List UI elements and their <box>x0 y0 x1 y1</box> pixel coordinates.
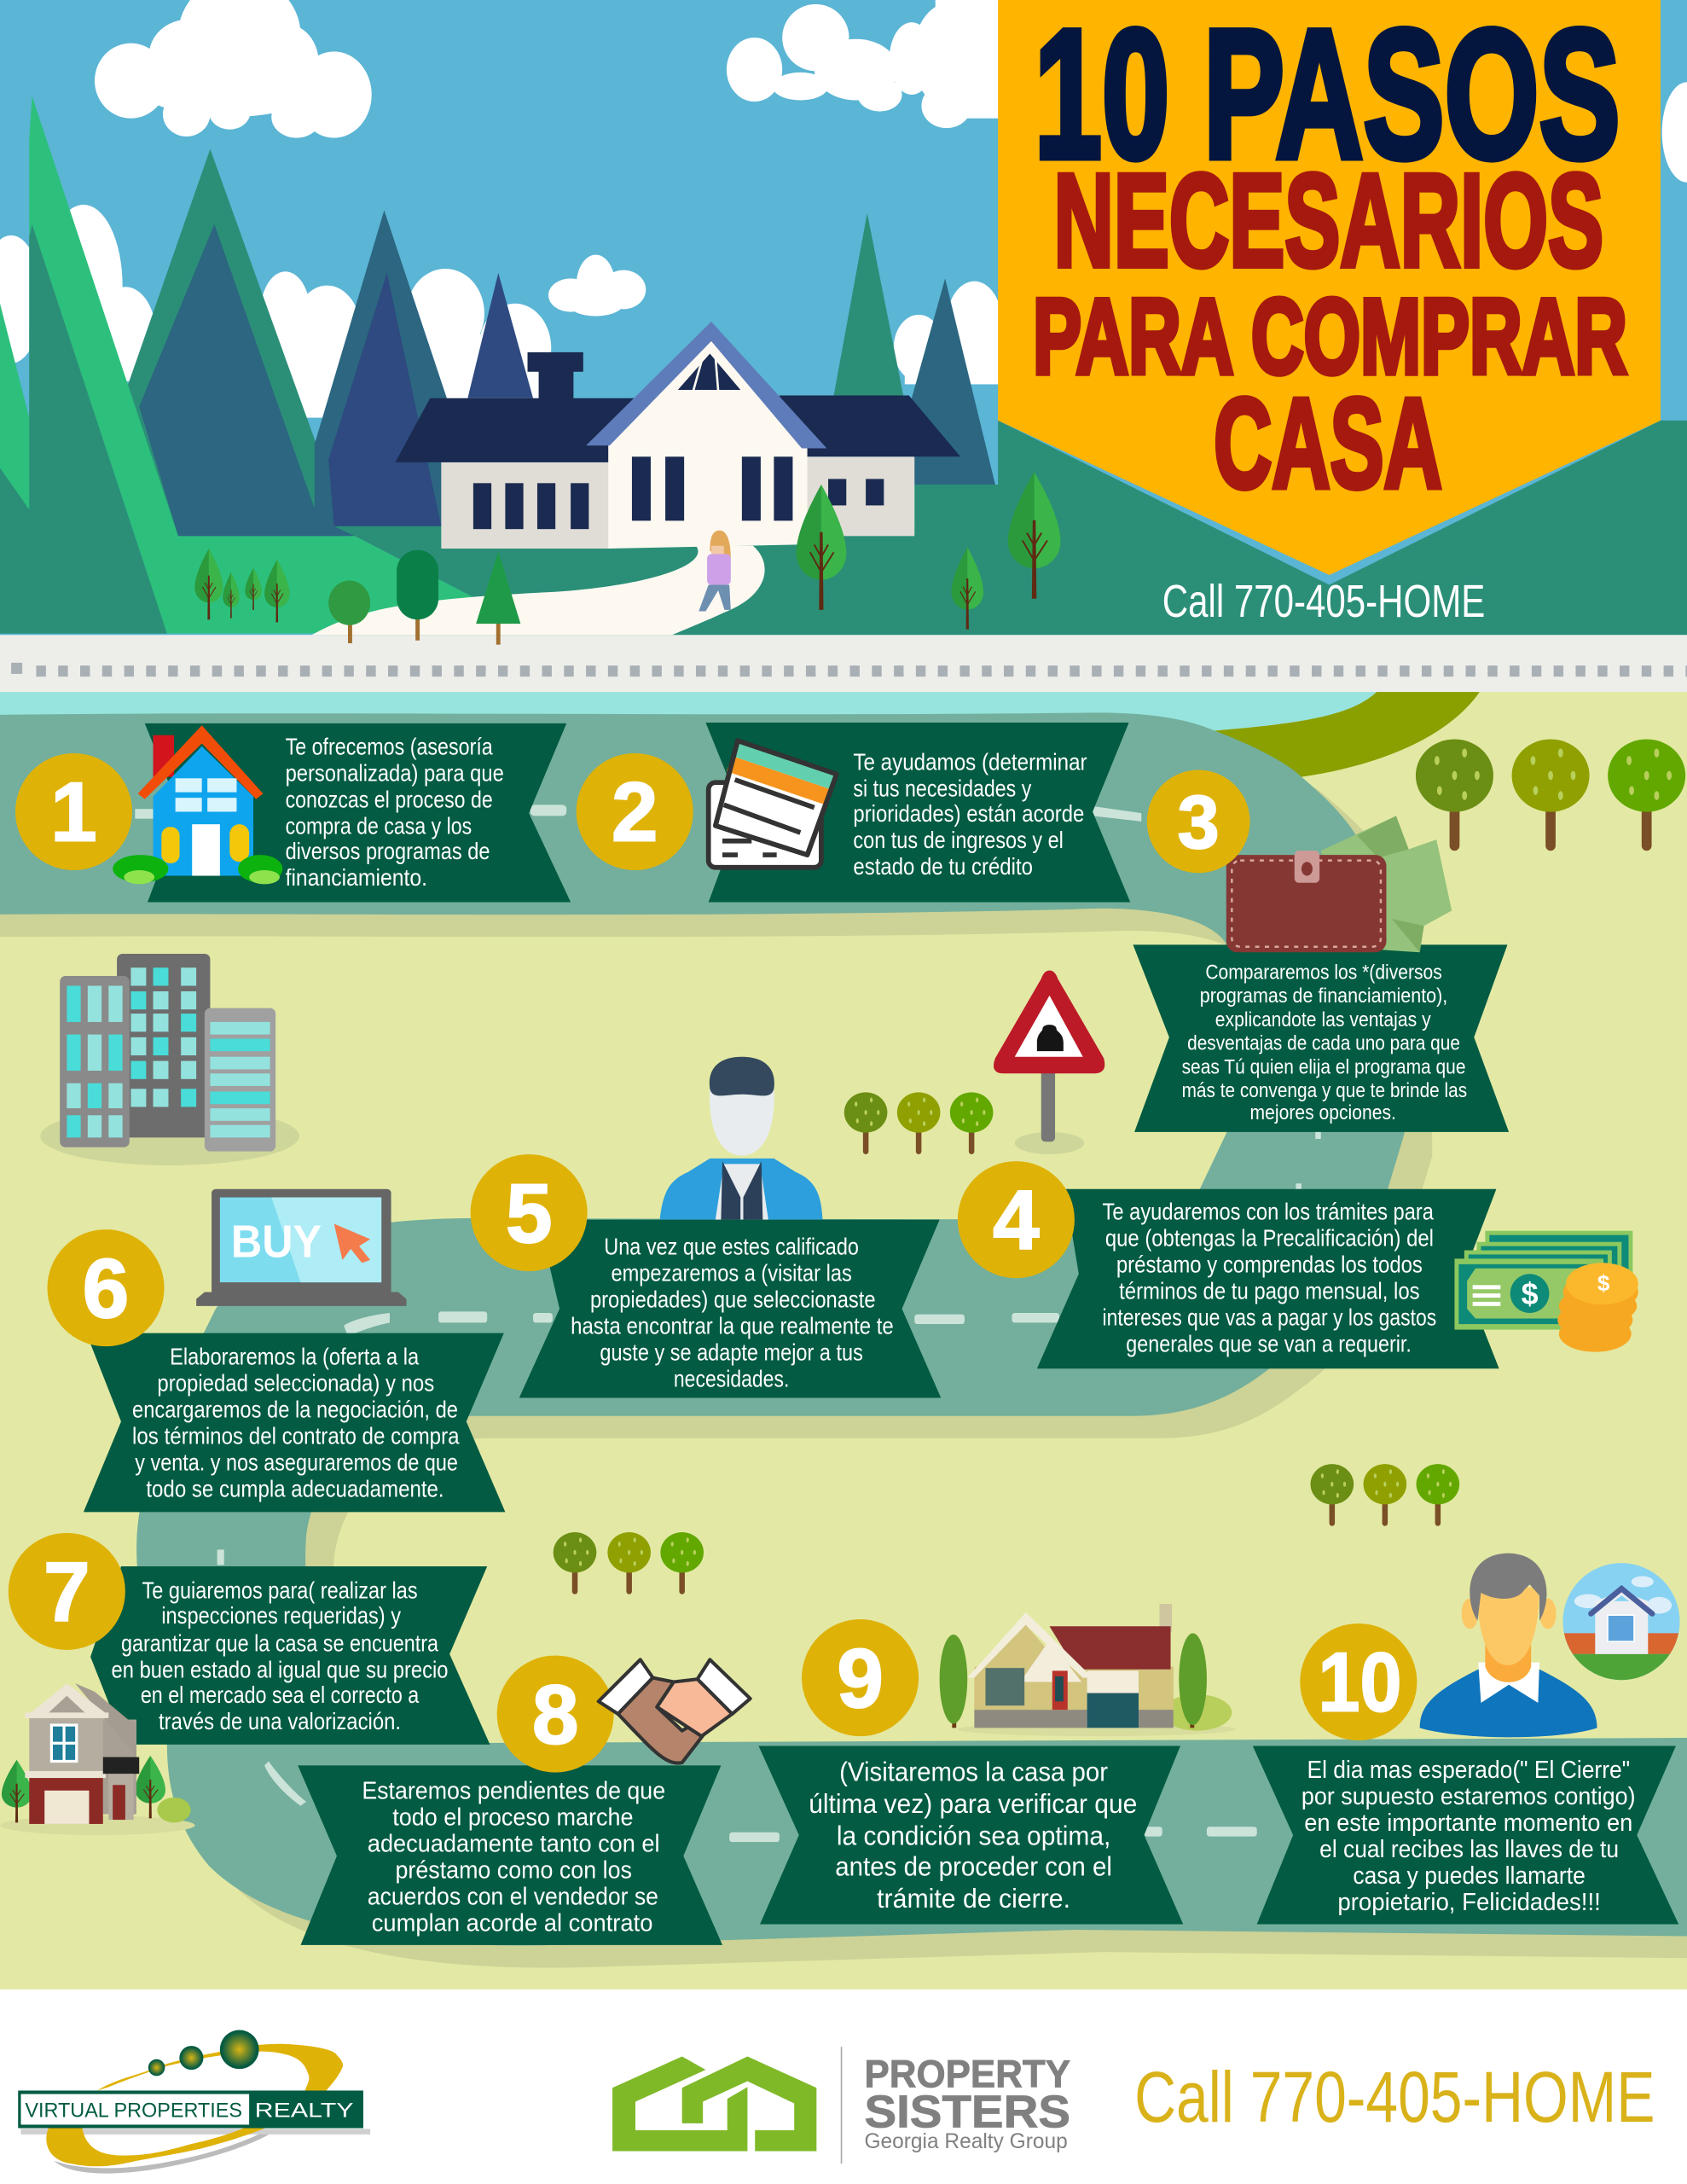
trees middle <box>554 1532 704 1594</box>
icon: townhouse <box>0 1683 194 1835</box>
text 1: Te ofrecemos (asesoría <box>286 734 493 760</box>
road shadow <box>0 735 1687 1968</box>
number 5 <box>471 1154 588 1271</box>
text 4: términos de tu pago mensual, los <box>1119 1278 1420 1304</box>
winding road <box>0 712 1687 1945</box>
trees by road sign <box>844 1092 993 1154</box>
step 4 panel <box>958 1161 1638 1368</box>
icon: homeowner man <box>1420 1554 1597 1737</box>
icon: laptop BUY: BUY <box>231 1217 322 1268</box>
icon: wallet with money <box>1226 816 1452 952</box>
text 6: los términos del contrato de compra <box>132 1422 460 1449</box>
road strip <box>0 635 1687 692</box>
text 4: generales que se van a requerir. <box>1126 1331 1412 1357</box>
step 7 panel <box>0 1533 490 1835</box>
text 1: personalizada) para que <box>286 760 504 787</box>
text 3: explicandote las ventajas y <box>1215 1008 1431 1031</box>
text 10: casa y puedes llamarte <box>1353 1862 1586 1890</box>
field background <box>0 692 1687 1989</box>
text 8 <box>362 1778 665 1937</box>
text 1: conozcas el proceso de <box>286 787 493 813</box>
text 3: más te convenga y que te brinde las <box>1182 1079 1467 1102</box>
text 7: garantizar que la casa se encuentra <box>121 1630 439 1657</box>
person walking <box>699 531 731 611</box>
icon: handshake <box>599 1659 751 1763</box>
text 10: por supuesto estaremos contigo) <box>1301 1783 1636 1810</box>
text 7: Te guiaremos para( realizar las <box>142 1577 418 1604</box>
number 6: 6 <box>83 1241 129 1335</box>
text 2: prioridades) están acorde <box>853 800 1084 827</box>
number 3: 3 <box>1178 780 1220 864</box>
number 6 <box>47 1229 165 1346</box>
number 10 <box>1300 1623 1417 1740</box>
ribbon 4 <box>1037 1189 1499 1368</box>
text 4: préstamo y comprendas los todos <box>1116 1252 1423 1278</box>
water band <box>0 692 1377 780</box>
text 6: todo se cumpla adecuadamente. <box>146 1475 444 1502</box>
text 3: mejores opciones. <box>1250 1101 1396 1124</box>
icon: road sign <box>994 971 1104 1154</box>
number 4 <box>958 1161 1075 1278</box>
divider <box>841 2047 842 2164</box>
text 6: propiedad seleccionada) y nos <box>157 1369 434 1396</box>
number 1: 1 <box>50 765 97 859</box>
text 8: préstamo como con los <box>395 1857 632 1885</box>
text 5 <box>571 1233 894 1391</box>
mountains <box>0 96 995 634</box>
icon: blue house <box>113 725 282 884</box>
text 7: en buen estado al igual que su precio <box>112 1657 449 1683</box>
ribbon 5 <box>519 1220 941 1398</box>
number 7: 7 <box>43 1545 90 1639</box>
text 1 <box>286 734 504 891</box>
text 10: en este importante momento en <box>1304 1809 1632 1837</box>
text 6: encargaremos de la negociación, de <box>132 1396 458 1422</box>
trees top right <box>1416 739 1685 851</box>
text 9: la condición sea optima, <box>837 1820 1110 1850</box>
icon: laptop BUY <box>196 1189 407 1306</box>
text: property sisters: Georgia Realty Group <box>864 2129 1068 2153</box>
icon: suburban house <box>940 1604 1236 1736</box>
text 9: antes de proceder con el <box>835 1850 1112 1881</box>
text 7: inspecciones requeridas) y <box>161 1602 401 1629</box>
icon: house in circle <box>1559 1563 1684 1682</box>
text 6: Elaboraremos la (oferta a la <box>170 1343 420 1369</box>
text 5: guste y se adapte mejor a tus <box>600 1339 863 1365</box>
number 8 <box>497 1655 614 1773</box>
text: property sisters: PROPERTY <box>864 2052 1070 2095</box>
logo: virtual properties realty: REALTY <box>255 2099 354 2122</box>
scene trees <box>194 472 1060 645</box>
icon: office buildings <box>40 954 299 1165</box>
text 5: hasta encontrar la que realmente te <box>571 1312 894 1339</box>
title: casa: CASA <box>1214 371 1442 514</box>
text 2: con tus de ingresos y el <box>853 827 1064 853</box>
text 8: adecuadamente tanto con el <box>368 1831 660 1858</box>
ribbon 3 <box>1133 944 1509 1132</box>
step 2 panel <box>577 723 1130 903</box>
text 6 <box>132 1343 460 1502</box>
text: property sisters: SISTERS <box>864 2087 1070 2138</box>
footer background <box>0 1989 1687 2184</box>
text 1: diversos programas de <box>286 838 490 864</box>
text 10: propietario, Felicidades!!! <box>1337 1889 1601 1916</box>
text 4 <box>1103 1199 1436 1357</box>
icon: bank notes and coins: $ <box>1597 1270 1610 1296</box>
text 5: propiedades) que seleccionaste <box>590 1286 876 1312</box>
text 9: trámite de cierre. <box>877 1883 1070 1914</box>
text 7: través de una valorización. <box>159 1708 401 1734</box>
text 8: todo el proceso marche <box>392 1804 634 1832</box>
olive bank <box>1211 692 1480 777</box>
text 9: (Visitaremos la casa por <box>839 1756 1108 1786</box>
text 5: Una vez que estes calificado <box>604 1233 859 1259</box>
text 8: Estaremos pendientes de que <box>362 1778 665 1805</box>
number 8: 8 <box>532 1667 578 1761</box>
ribbon 9 <box>758 1746 1183 1924</box>
phone call top: Call 770-405-HOME <box>1162 576 1485 627</box>
icon: businessman <box>660 1057 823 1220</box>
step 10 panel <box>1253 1554 1684 1924</box>
text 5: empezaremos a (visitar las <box>611 1259 852 1286</box>
step 5 panel <box>471 1154 941 1398</box>
text 3: desventajas de cada uno para que <box>1187 1032 1460 1055</box>
ribbon 1 <box>145 723 571 903</box>
text 1: compra de casa y los <box>286 813 472 839</box>
logo: property sisters mark <box>612 2056 816 2151</box>
garden path <box>312 546 765 635</box>
text 3 <box>1182 961 1467 1124</box>
teal foreground mountain <box>0 224 167 634</box>
icon: bank notes and coins: $ <box>1522 1277 1539 1311</box>
number 4: 4 <box>993 1173 1040 1267</box>
number 5: 5 <box>506 1166 552 1260</box>
text 8: acuerdos con el vendedor se <box>368 1884 658 1911</box>
text 9 <box>809 1756 1137 1914</box>
ribbon 8 <box>298 1765 722 1945</box>
trees lower right <box>1311 1464 1459 1526</box>
step 6 panel <box>47 1229 505 1512</box>
step 8 panel <box>298 1655 751 1945</box>
text 7 <box>112 1577 449 1734</box>
ribbon 10 <box>1253 1746 1678 1924</box>
icon: credit cards <box>709 741 837 868</box>
number 7 <box>9 1533 125 1650</box>
text 10: El dia mas esperado(" El Cierre" <box>1307 1757 1630 1784</box>
logo: virtual properties realty: VIRTUAL PROPERTIES <box>25 2099 242 2122</box>
number 3 <box>1147 770 1250 873</box>
clouds <box>0 0 1687 418</box>
number 2 <box>577 753 693 870</box>
house <box>395 322 960 549</box>
step 9 panel <box>758 1604 1236 1924</box>
text 2: estado de tu crédito <box>853 853 1033 880</box>
number 9: 9 <box>837 1631 884 1725</box>
text 8: cumplan acorde al contrato <box>372 1910 652 1937</box>
step 1 panel <box>15 723 571 903</box>
text 6: y venta. y nos aseguraremos de que <box>135 1449 458 1475</box>
text 5: necesidades. <box>674 1365 789 1391</box>
road dashes <box>135 804 1321 1842</box>
text 2: Te ayudamos (determinar <box>853 749 1087 775</box>
ribbon 7 <box>90 1566 490 1745</box>
text 4: que (obtengas la Precalificación) del <box>1105 1225 1434 1252</box>
sky background <box>0 0 1687 641</box>
ribbon 2 <box>705 723 1130 903</box>
number 2: 2 <box>612 765 658 859</box>
text 3: Compararemos los *(diversos <box>1205 961 1442 984</box>
ribbon 6 <box>84 1333 505 1512</box>
text 2 <box>853 749 1087 880</box>
text 4: Te ayudaremos con los trámites para <box>1103 1199 1434 1225</box>
text 3: programas de financiamiento), <box>1200 985 1447 1008</box>
number 10: 10 <box>1319 1635 1401 1729</box>
icon: bank notes and coins <box>1454 1231 1638 1352</box>
text 1: financiamiento. <box>286 864 427 891</box>
number 9 <box>802 1619 919 1736</box>
title banner <box>998 0 1661 575</box>
text 10 <box>1301 1757 1636 1916</box>
text: property sisters <box>864 2052 1070 2153</box>
ground <box>312 421 1687 637</box>
text 7: en el mercado sea el correcto a <box>141 1682 420 1708</box>
text 2: si tus necesidades y <box>853 775 1031 802</box>
text 3: seas Tú quien elija el programa que <box>1182 1055 1466 1078</box>
logo: virtual properties realty <box>18 2030 370 2174</box>
step 3 panel <box>1133 770 1509 1132</box>
text 4: intereses que vas a pagar y los gastos <box>1103 1304 1436 1331</box>
text 10: el cual recibes las llaves de tu <box>1319 1836 1619 1863</box>
text 9: última vez) para verificar que <box>809 1788 1137 1819</box>
number 1 <box>15 753 132 870</box>
